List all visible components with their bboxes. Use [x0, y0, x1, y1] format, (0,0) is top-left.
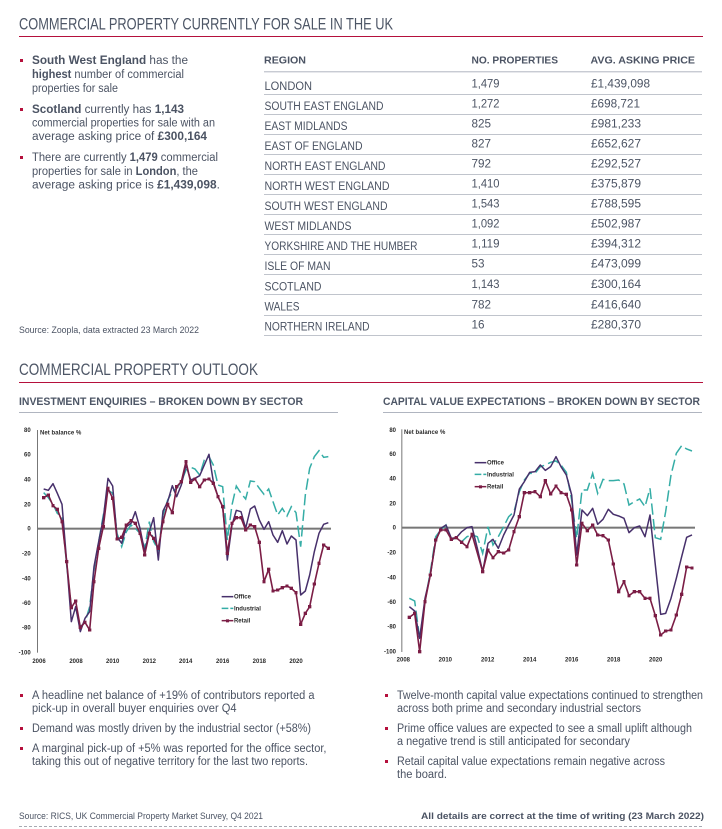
legend	[475, 461, 514, 491]
table rows: WALES	[264, 302, 300, 314]
axis labels: 2016	[216, 659, 230, 665]
axis labels: -80	[22, 626, 31, 632]
axis labels: -100	[19, 650, 31, 656]
heading: capital value expectations: CAPITAL VALUE EXPECTATIONS – BROKEN DOWN BY SECTOR	[383, 396, 700, 408]
table rows: SOUTH WEST ENGLAND	[264, 201, 388, 213]
bullets: investment enquiries	[20, 690, 326, 768]
axis labels: Net balance %	[404, 430, 446, 436]
table rows	[264, 78, 650, 334]
table rows: £375,879	[591, 178, 641, 190]
axis labels: -60	[22, 601, 31, 607]
table rows: £473,099	[591, 258, 641, 270]
table rows: 782	[472, 299, 491, 311]
axis labels: 2020	[649, 658, 663, 664]
axis labels: -40	[387, 576, 397, 582]
legend: Office	[487, 461, 505, 467]
table header	[264, 54, 695, 66]
note: correct at time of writing: All details are correct at the time of writing (23 March 2022)	[421, 811, 704, 821]
series: retail	[409, 481, 692, 652]
axis labels: 0	[27, 527, 31, 533]
axis labels: 60	[24, 453, 31, 459]
axis labels: -20	[22, 552, 31, 558]
axis labels: 2006	[32, 659, 46, 665]
table rows: 1,143	[472, 279, 500, 291]
table rows: 1,092	[472, 218, 500, 230]
table rows: YORKSHIRE AND THE HUMBER	[264, 241, 418, 253]
bullets: capital value expectations	[385, 690, 703, 781]
source: Zoopla: Source: Zoopla, data extracted 23 March 2022	[19, 325, 199, 335]
series: office	[409, 457, 692, 638]
table rows: 1,272	[472, 98, 500, 110]
table rows: 827	[472, 138, 491, 150]
bullets: capital value expectations: a negative trend is still anticipated for secondary	[397, 736, 630, 748]
table rows: WEST MIDLANDS	[264, 221, 352, 233]
table rows: ISLE OF MAN	[264, 261, 330, 273]
table rows: £698,721	[591, 98, 640, 110]
axis labels: 40	[389, 477, 397, 483]
axis labels	[19, 428, 303, 665]
bullets: capital value expectations: Twelve-month capital value expectations continued to strengthen	[397, 690, 703, 702]
title: commercial property for sale: COMMERCIAL PROPERTY CURRENTLY FOR SALE IN THE UK	[19, 16, 393, 34]
table rows: £280,370	[591, 319, 641, 331]
axis labels: -80	[387, 625, 397, 631]
axis labels: 20	[389, 501, 397, 507]
series: industrial	[44, 451, 328, 627]
table rows: £502,987	[591, 218, 641, 230]
axis labels: 2010	[439, 658, 453, 664]
axis labels: 2010	[106, 659, 120, 665]
table rows: LONDON	[264, 81, 312, 93]
table rows: EAST OF ENGLAND	[264, 141, 362, 153]
axis labels	[384, 428, 663, 664]
table rows: £416,640	[591, 299, 641, 311]
table header: NO. PROPERTIES	[472, 54, 558, 66]
bullets: investment enquiries: A marginal pick-up of +5% was reported for the office sector,	[32, 743, 326, 755]
table rows: £981,233	[591, 118, 641, 130]
table rows: 1,410	[472, 178, 500, 190]
line chart: capital value expectations	[384, 428, 695, 664]
table header: AVG. ASKING PRICE	[590, 54, 695, 66]
panel: key findings bullets: Scotland currently has 1,143	[32, 104, 184, 116]
panel: key findings bullets: highest number of commercial	[32, 69, 184, 81]
bullets: capital value expectations: Prime office values are expected to see a small uplift although	[397, 723, 692, 735]
series: office	[44, 454, 328, 632]
table rows: £652,627	[591, 138, 641, 150]
panel: key findings bullets: properties for sale	[32, 83, 118, 95]
panel: key findings bullets: commercial properties for sale with an	[32, 118, 215, 130]
table: regions, properties and prices	[264, 54, 702, 336]
bullets: capital value expectations: across both prime and secondary industrial sectors	[397, 703, 641, 715]
title: commercial property outlook: COMMERCIAL PROPERTY OUTLOOK	[19, 361, 258, 379]
axis labels: 2008	[69, 659, 83, 665]
table header: REGION	[264, 54, 306, 66]
axis labels: 2020	[289, 659, 303, 665]
table rows: 1,479	[472, 78, 500, 90]
bullets: capital value expectations: the board.	[397, 769, 447, 781]
panel: key findings bullets: average asking price is £1,439,098.	[32, 180, 220, 192]
table rows: NORTH WEST ENGLAND	[264, 181, 390, 193]
table rows: £788,595	[591, 198, 641, 210]
series: retail	[44, 462, 328, 630]
axis labels: 2016	[565, 658, 579, 664]
table rows: EAST MIDLANDS	[264, 121, 348, 133]
axis labels: -100	[384, 650, 397, 656]
panel: key findings bullets: average asking price of £300,164	[32, 131, 208, 143]
table rows: 16	[472, 319, 484, 331]
bullets: investment enquiries: pick-up in overall buyer enquiries over Q4	[32, 703, 237, 715]
axis labels: 2018	[253, 659, 267, 665]
table rows: 53	[472, 258, 484, 270]
table rows: £292,527	[591, 158, 641, 170]
panel: key findings bullets: There are currently 1,479 commercial	[32, 152, 218, 164]
legend: Office	[234, 595, 252, 601]
axis labels: -60	[387, 600, 397, 606]
axis labels: 60	[389, 452, 397, 458]
heading: investment enquiries: INVESTMENT ENQUIRIES – BROKEN DOWN BY SECTOR	[19, 396, 303, 408]
panel: key findings bullets: South West England has the	[32, 55, 188, 67]
table rows: £394,312	[591, 238, 641, 250]
table rows: £300,164	[591, 279, 642, 291]
axis labels: Net balance %	[40, 431, 82, 437]
table rows: £1,439,098	[591, 78, 650, 90]
axis labels: 0	[393, 526, 397, 532]
line chart: investment enquiries	[19, 428, 331, 665]
table rows: NORTHERN IRELAND	[264, 322, 370, 334]
bullets: investment enquiries: A headline net balance of +19% of contributors reported a	[32, 690, 315, 702]
bullets: investment enquiries: Demand was mostly driven by the industrial sector (+58%)	[32, 723, 311, 735]
axis labels: 2018	[607, 658, 621, 664]
table rows: 792	[472, 158, 491, 170]
table rows: SOUTH EAST ENGLAND	[264, 101, 384, 113]
table rows: NORTH EAST ENGLAND	[264, 161, 386, 173]
axis labels: 2008	[397, 658, 411, 664]
axis labels: 2012	[481, 658, 495, 664]
axis labels: -20	[387, 550, 397, 556]
panel: key findings bullets	[20, 55, 220, 192]
axis labels: 80	[389, 428, 397, 434]
axis labels: 80	[24, 428, 31, 434]
axis labels: -40	[22, 576, 31, 582]
legend: Retail	[234, 619, 251, 625]
table rows: 1,119	[472, 238, 500, 250]
axis labels: 2014	[179, 659, 193, 665]
legend: Retail	[487, 485, 504, 491]
table rows: 825	[472, 118, 491, 130]
axis labels: 2014	[523, 658, 537, 664]
table rows: 1,543	[472, 198, 500, 210]
legend: Industrial	[234, 606, 261, 612]
panel: key findings bullets: properties for sale in London, the	[32, 166, 198, 178]
legend	[222, 595, 261, 625]
table rows: SCOTLAND	[264, 282, 322, 294]
bullets: capital value expectations: Retail capital value expectations remain negative across	[397, 756, 665, 768]
axis labels: 40	[24, 478, 31, 484]
bullets: investment enquiries: taking this out of negative territory for the last two reports.	[32, 756, 308, 768]
axis labels: 2012	[143, 659, 157, 665]
legend: Industrial	[487, 472, 514, 478]
series: industrial	[409, 446, 692, 638]
source: RICS: Source: RICS, UK Commercial Property Market Survey, Q4 2021	[19, 811, 263, 821]
axis labels: 20	[24, 502, 31, 508]
